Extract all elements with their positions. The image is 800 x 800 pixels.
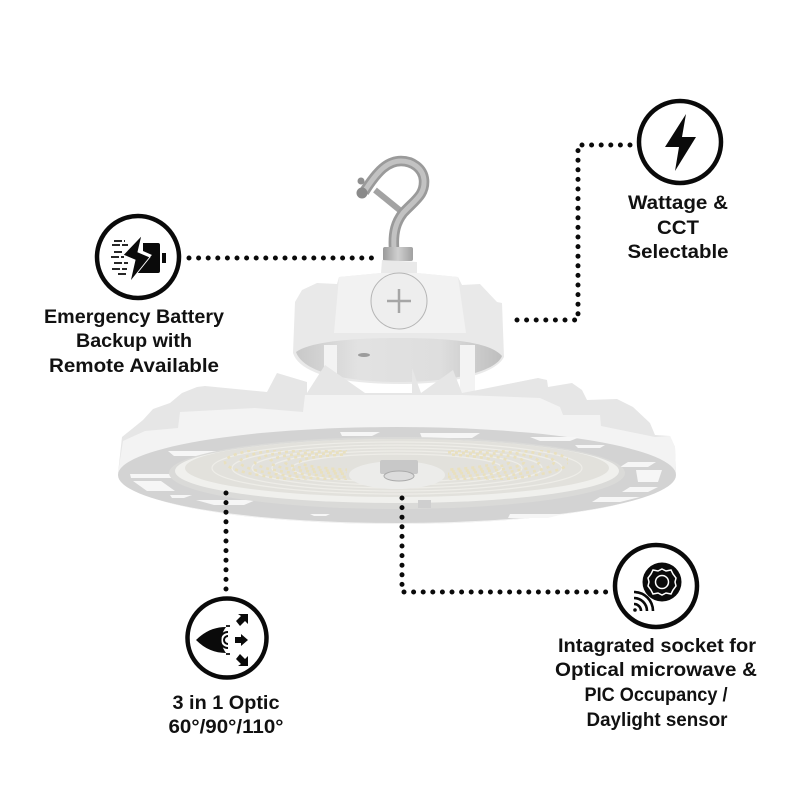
- icon: eye with optic arrows: [188, 598, 266, 678]
- central sensor socket: [349, 460, 445, 489]
- text: integrated socket: PIC Occupancy /: [584, 685, 728, 706]
- text: emergency battery: Backup with: [76, 331, 192, 352]
- icon: lightning bolt: [639, 101, 721, 183]
- cover plate: [371, 273, 427, 329]
- LED array: [224, 450, 568, 480]
- text: 3 in 1 optic: 60°/90°/110°: [168, 717, 284, 738]
- text: integrated socket: Intagrated socket for: [558, 636, 757, 657]
- text: integrated socket: Optical microwave &: [555, 660, 757, 681]
- text: integrated socket: [555, 636, 757, 731]
- driver housing: [293, 260, 504, 395]
- text: integrated socket: Daylight sensor: [586, 710, 728, 731]
- text: emergency battery: [44, 307, 224, 377]
- text: wattage and CCT: CCT: [657, 218, 699, 239]
- text: emergency battery: Remote Available: [49, 356, 219, 377]
- connector: wattage and CCT: [508, 145, 630, 320]
- heat sink body: [118, 365, 676, 524]
- reflector face ring: [118, 427, 676, 523]
- text: wattage and CCT: [628, 193, 728, 263]
- icon: sensor socket with wireless signal: [615, 545, 697, 627]
- illustration: high bay light fixture: [118, 161, 676, 524]
- lens: [169, 437, 625, 509]
- connector: integrated socket: [402, 498, 610, 592]
- text: 3 in 1 optic: [168, 693, 284, 738]
- hook: [356, 161, 424, 261]
- icon: battery with lightning bolt: [97, 216, 179, 298]
- text: 3 in 1 optic: 3 in 1 Optic: [172, 693, 280, 714]
- connector: 3 in 1 optic: [224, 493, 228, 592]
- connector: emergency battery: [189, 256, 374, 260]
- text: wattage and CCT: Wattage &: [628, 193, 728, 214]
- text: emergency battery: Emergency Battery: [44, 307, 224, 328]
- text: wattage and CCT: Selectable: [628, 242, 728, 263]
